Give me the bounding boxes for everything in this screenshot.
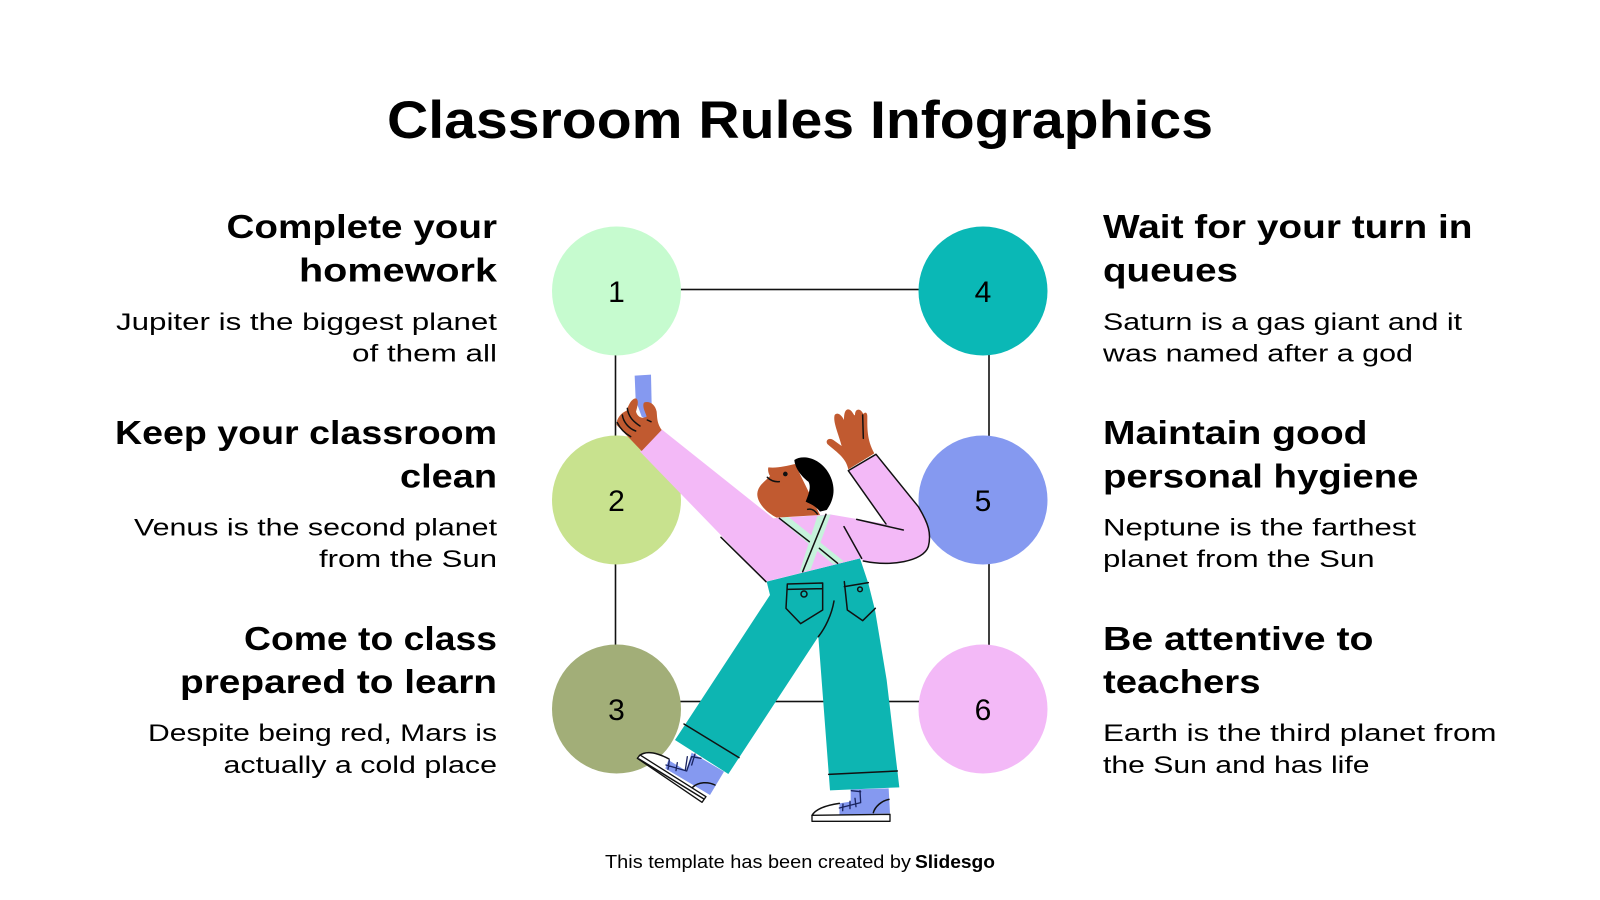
panel: rule 6: [1103, 620, 1496, 779]
body: rule 4: [1102, 309, 1462, 368]
heading: rule 5: [1103, 414, 1418, 494]
heading: rule 6: Be attentive to: [1103, 620, 1374, 657]
icon: back shoe: [637, 740, 724, 802]
body: rule 6: [1103, 720, 1496, 779]
connector frame between circles: [616, 290, 989, 702]
head: [757, 457, 834, 518]
heading: rule 3: Come to class: [244, 620, 497, 657]
heading: rule 5: personal hygiene: [1103, 458, 1418, 494]
body: rule 6: Earth is the third planet from: [1103, 720, 1496, 747]
suspenders: [779, 514, 844, 573]
footer credit: This template has been created by: [605, 852, 911, 872]
panel: rule 5: [1103, 414, 1418, 573]
heading: rule 1: Complete your: [226, 208, 497, 245]
upper body: [617, 375, 930, 582]
heading: rule 6: teachers: [1103, 663, 1260, 700]
legs and shoes: [637, 558, 899, 821]
body: rule 4: was named after a god: [1102, 340, 1413, 368]
body: rule 1: [116, 309, 497, 368]
illustration: student taking a selfie: [617, 375, 930, 821]
heading: rule 2: [115, 414, 497, 494]
heading: rule 6: [1103, 620, 1374, 700]
circle 6: [918, 644, 1048, 774]
body: rule 6: the Sun and has life: [1103, 752, 1370, 779]
heading: rule 3: [180, 620, 497, 700]
circle 1: 1: [608, 276, 625, 309]
footer credit: Slidesgo: [915, 852, 995, 872]
heading: rule 1: homework: [299, 252, 498, 288]
icon: open hand: [827, 409, 874, 469]
icon: front shoe: [812, 788, 890, 821]
sweater: [640, 429, 930, 582]
icon: phone: [635, 375, 652, 419]
body: rule 2: [134, 514, 497, 573]
heading: rule 3: prepared to learn: [180, 663, 497, 700]
body: rule 3: actually a cold place: [224, 752, 497, 779]
trousers: [675, 558, 899, 790]
circle 3: [552, 644, 681, 774]
circle 2: [552, 436, 681, 564]
panel: rule 1: [116, 208, 498, 368]
body: rule 5: planet from the Sun: [1103, 546, 1374, 573]
heading: rule 5: Maintain good: [1103, 414, 1368, 451]
body: rule 3: Despite being red, Mars is: [148, 720, 497, 747]
heading: rule 4: Wait for your turn in: [1103, 208, 1472, 245]
circle 3: 3: [608, 694, 625, 727]
body: rule 3: [148, 720, 497, 779]
icon: raised hand holding phone: [617, 398, 662, 451]
body: rule 1: of them all: [352, 340, 497, 368]
heading: rule 4: queues: [1103, 252, 1238, 288]
body: rule 5: Neptune is the farthest: [1103, 514, 1416, 542]
body: rule 4: Saturn is a gas giant and it: [1103, 309, 1462, 336]
circle 2: 2: [608, 485, 625, 518]
panel: rule 3: [148, 620, 497, 779]
heading: rule 1: [226, 208, 498, 288]
heading: rule 4: [1103, 208, 1472, 288]
sweater outlines: [721, 454, 930, 582]
title: Classroom Rules Infographics: [387, 91, 1213, 150]
circle 5: 5: [975, 485, 991, 518]
body: rule 5: [1103, 514, 1416, 573]
circle 5: [918, 436, 1048, 564]
panel: rule 2: [115, 414, 497, 573]
circle 1: [552, 226, 681, 356]
heading: rule 2: clean: [400, 458, 497, 494]
panel: rule 4: [1102, 208, 1472, 368]
circle 6: 6: [975, 694, 991, 727]
body: rule 1: Jupiter is the biggest planet: [116, 309, 497, 336]
body: rule 2: from the Sun: [319, 546, 497, 573]
circle 4: 4: [975, 276, 991, 309]
heading: rule 2: Keep your classroom: [115, 414, 497, 451]
trouser details: [684, 582, 897, 774]
circle 4: [918, 226, 1048, 356]
body: rule 2: Venus is the second planet: [134, 514, 497, 542]
